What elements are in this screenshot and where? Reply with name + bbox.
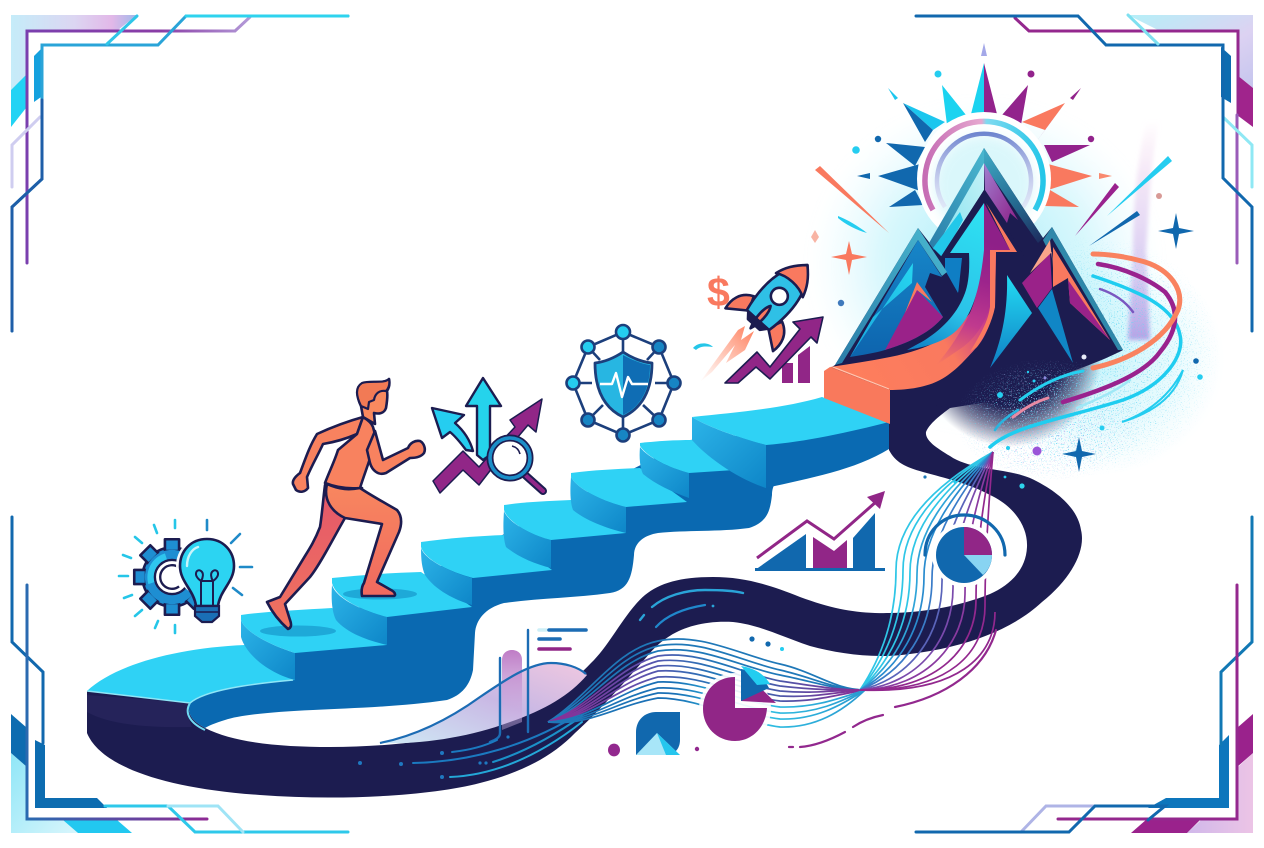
back arm <box>293 417 363 492</box>
sun rays behind the mountain <box>857 43 1112 207</box>
small purple dots <box>608 744 699 756</box>
burst sparks around the summit <box>811 70 1203 489</box>
step 7 <box>692 397 889 488</box>
landing tread <box>87 645 295 703</box>
cosmic swirl lines <box>990 254 1183 447</box>
torso <box>325 417 376 488</box>
area chart with bars on the lower ribbon <box>378 630 587 743</box>
central peak outline <box>929 148 984 250</box>
network lines <box>573 332 674 435</box>
outer speckle dust <box>991 238 1216 471</box>
navy winding ribbon path <box>87 300 1082 798</box>
arrow purple half <box>935 203 1010 366</box>
rays <box>119 520 252 633</box>
magenta dashed arc <box>789 630 996 747</box>
arrow navy outline <box>880 190 1024 355</box>
central pale facet <box>935 163 984 256</box>
icon: shield network <box>566 325 680 442</box>
dollar sign: $ <box>707 269 730 315</box>
figure: running person <box>267 379 425 629</box>
inner speckle dust <box>960 360 1140 480</box>
legend bars <box>539 630 586 649</box>
front leg <box>326 484 401 596</box>
gear <box>134 539 204 615</box>
step 3 <box>421 535 552 605</box>
pie chart with arc, right <box>925 515 1005 587</box>
bulb <box>176 535 238 622</box>
central purple facet <box>984 163 1018 223</box>
step 5 <box>570 468 687 533</box>
rocket exhaust <box>693 326 754 382</box>
orange swoosh band <box>830 253 996 390</box>
lighter top band on base platform <box>87 695 192 727</box>
step 6 <box>640 440 765 498</box>
trend chart icon <box>755 491 885 571</box>
mountain range <box>824 148 1123 424</box>
head <box>357 379 389 424</box>
back leg <box>267 485 362 629</box>
nodes <box>566 325 680 442</box>
up arrow <box>466 378 501 460</box>
icon: rising arrow with bars <box>725 317 823 383</box>
stair body <box>189 422 889 728</box>
leaf chart icon <box>636 712 680 755</box>
right peak outline <box>1043 227 1123 350</box>
swoosh highlight <box>833 367 889 389</box>
orange step <box>824 367 890 424</box>
decorative dots <box>838 70 1203 489</box>
step 2 <box>332 572 472 645</box>
frame corner: top left <box>11 15 348 331</box>
flowing data lines: upper fan <box>860 452 995 690</box>
magnifier <box>490 438 543 491</box>
arrow cyan half <box>907 203 984 350</box>
right peak facets <box>1022 253 1052 308</box>
frame corner: bottom left <box>11 517 348 833</box>
icon: rocket <box>693 243 832 382</box>
halo rings <box>917 112 1051 246</box>
icon: diverging arrows with magnifier <box>432 378 543 493</box>
star: blue lower right <box>1062 437 1096 472</box>
rocket body <box>725 243 832 352</box>
mountain silhouette <box>824 148 1123 408</box>
zigzag chart with right arrow <box>433 399 542 493</box>
staircase <box>87 397 889 730</box>
summit arrow swoosh <box>830 190 1024 390</box>
left peak outline <box>835 228 947 365</box>
large pie chart, bottom <box>699 636 784 745</box>
ribbon accent lines <box>358 590 743 779</box>
central cyan and blue facets <box>933 212 963 258</box>
icon: gear and light bulb <box>119 520 252 633</box>
glow behind summit <box>810 100 1225 475</box>
shield <box>595 352 652 417</box>
star: blue upper right <box>1158 213 1194 249</box>
frame corner: bottom right <box>916 517 1253 833</box>
left arrow <box>432 408 473 451</box>
step 4 <box>503 500 626 568</box>
pulse line <box>600 373 648 397</box>
navy haze under the right peak <box>918 263 1102 447</box>
frame corner: top right <box>916 15 1253 331</box>
left peak facets <box>850 240 943 357</box>
star: orange <box>831 241 867 275</box>
flowing data lines: lower wave <box>548 639 865 727</box>
front arm <box>367 431 425 474</box>
arrow orange edge <box>970 203 1017 352</box>
step 1 <box>241 608 387 680</box>
